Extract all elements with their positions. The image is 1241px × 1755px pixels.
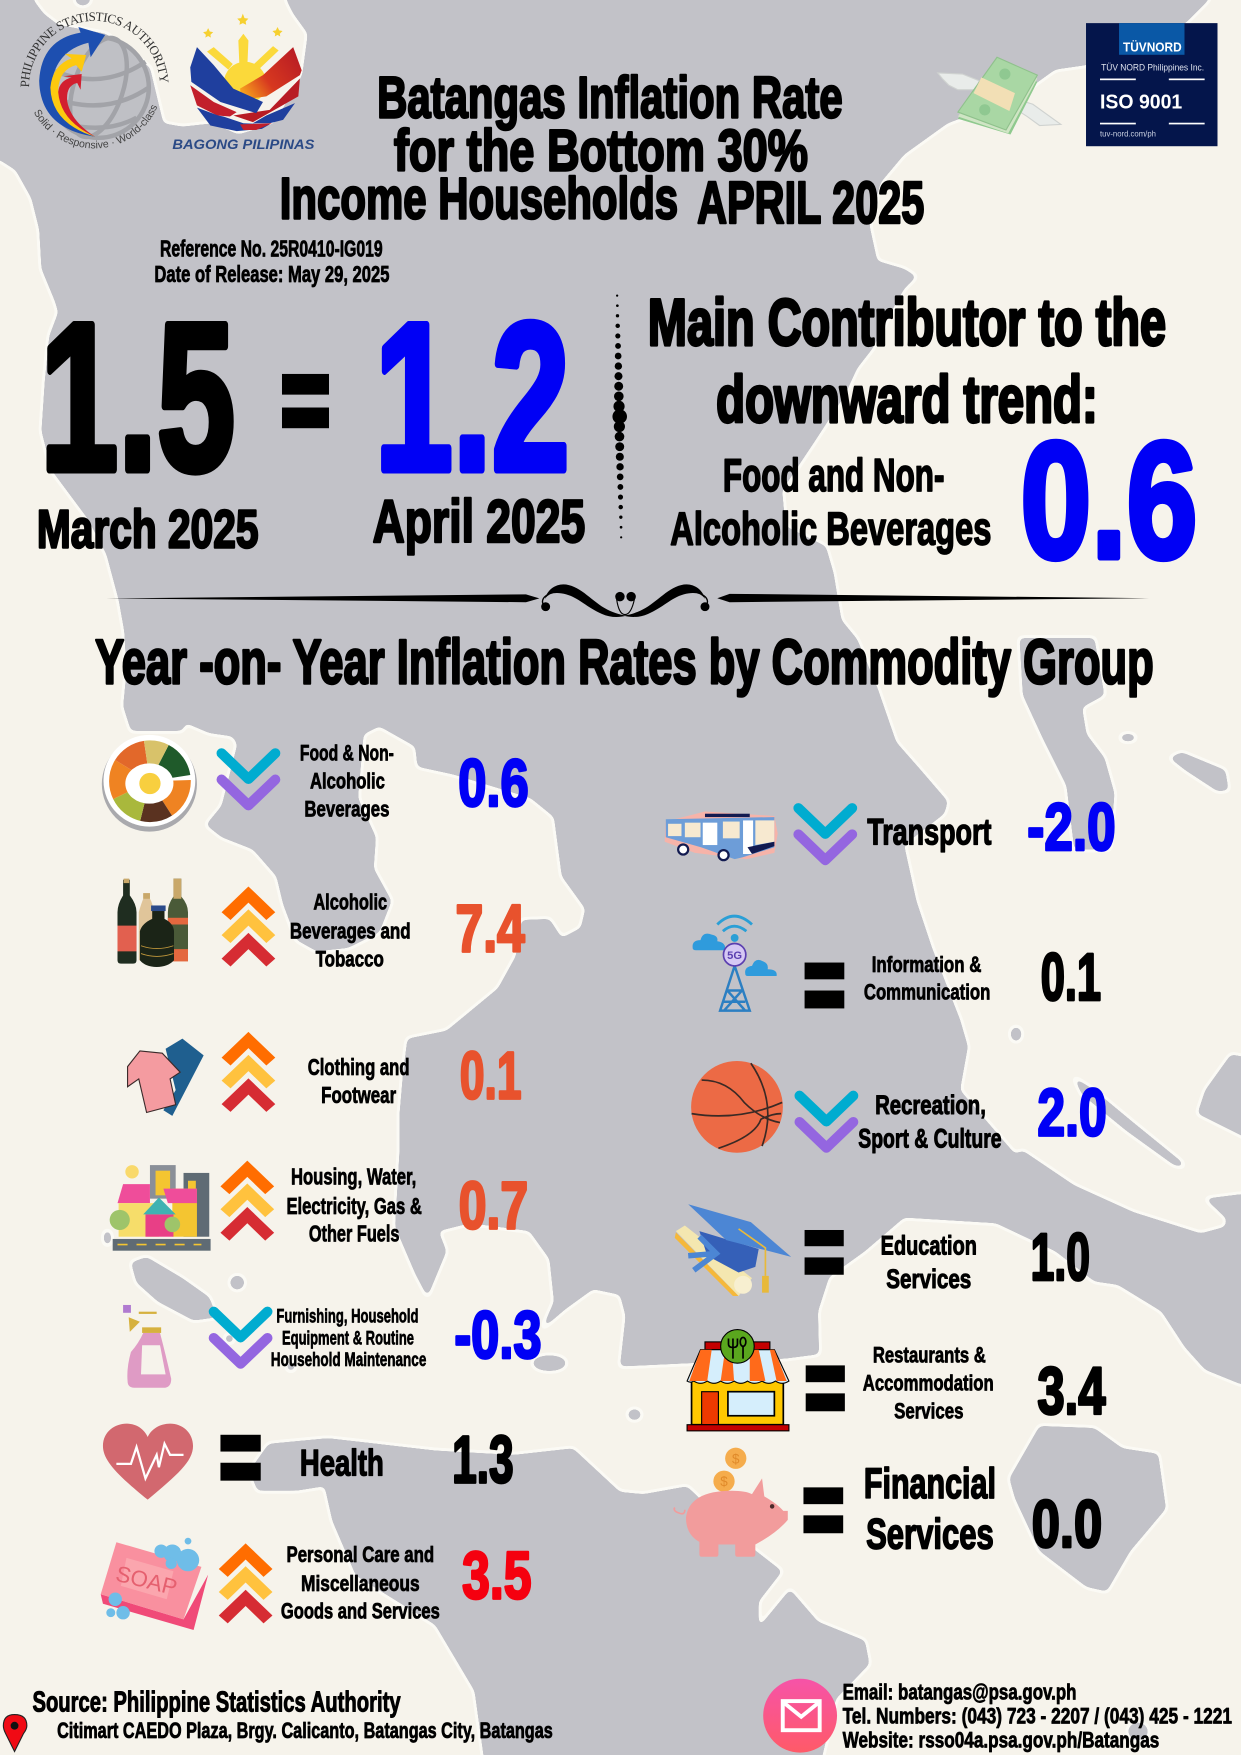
icon: bus	[665, 811, 778, 860]
label: Services	[866, 1511, 994, 1558]
label	[864, 1461, 996, 1558]
headline rate: April 2025: April 2025	[373, 487, 585, 555]
row: Recreation, Sport and Culture	[691, 1061, 1107, 1154]
label: Communication	[864, 979, 990, 1004]
icon: soap: SOAP	[113, 1561, 180, 1600]
icon: unchanged	[803, 1487, 843, 1533]
label: Miscellaneous	[301, 1571, 420, 1596]
logo: TUV NORD ISO 9001: TÜV NORD Philippines Inc.	[1101, 63, 1204, 73]
label: Financial	[864, 1461, 996, 1508]
label	[863, 1343, 994, 1424]
row: Health	[103, 1422, 514, 1500]
label	[290, 889, 411, 971]
label: Furnishing, Household	[276, 1305, 419, 1327]
icon: houses	[110, 1165, 211, 1251]
row: Information and Communication	[693, 916, 1101, 1015]
headline rate: March 2025	[37, 280, 258, 559]
main contributor panel: Food and Non-	[723, 449, 944, 501]
label: Accommodation	[863, 1371, 994, 1396]
dotted divider	[612, 294, 627, 538]
label: Electricity, Gas &	[286, 1193, 422, 1219]
value: 1.3	[452, 1422, 514, 1497]
label: Beverages	[304, 797, 389, 822]
label: Alcoholic	[313, 889, 387, 914]
label: Transport	[867, 811, 991, 852]
equal sign	[282, 374, 329, 428]
title: Income Households	[280, 166, 678, 231]
icon: trend up	[220, 1161, 274, 1241]
value: -2.0	[1027, 790, 1116, 865]
icon: piggy bank	[674, 1448, 788, 1557]
label	[864, 952, 990, 1004]
icon: location pin	[3, 1715, 27, 1751]
label	[281, 1542, 440, 1623]
label: Services	[894, 1399, 963, 1424]
icon: bottles	[117, 879, 188, 967]
logo: Bagong Pilipinas: BAGONG PILIPINAS	[172, 136, 315, 152]
main contributor panel: Alcoholic Beverages	[670, 503, 991, 555]
source and address: Source: Philippine Statistics Authority	[32, 1687, 401, 1719]
value: 0.6	[458, 746, 529, 821]
icon: trend up	[222, 886, 275, 966]
logo: Philippine Statistics Authority	[20, 12, 168, 148]
value: 0.1	[1041, 940, 1101, 1015]
label: Recreation,	[875, 1090, 986, 1120]
row: Financial Services	[674, 1448, 1102, 1562]
label: Footwear	[321, 1082, 396, 1108]
contact details	[843, 1679, 1232, 1753]
icon: heart with pulse	[103, 1424, 193, 1500]
label	[308, 1054, 410, 1108]
value: 0.1	[460, 1039, 521, 1114]
label: Health	[300, 1443, 384, 1484]
icon: 5G tower: 5G	[727, 950, 742, 962]
value: -0.3	[454, 1298, 542, 1373]
label: Other Fuels	[309, 1221, 399, 1247]
logo: TUV NORD ISO 9001: TÜVNORD	[1123, 40, 1182, 55]
row: Furnishing, Household Equipment and Routine Household Maintenance	[123, 1298, 542, 1388]
logo: Philippine Statistics Authority: Solid · Responsive · World-class	[34, 105, 157, 148]
label	[858, 1090, 1002, 1154]
row: Transport	[665, 790, 1116, 865]
row: Housing, Water, Electricity, Gas and Other Fuels	[110, 1161, 528, 1251]
icon: restaurant shop	[687, 1330, 789, 1431]
logo: TUV NORD ISO 9001	[1086, 23, 1218, 146]
icon: trend down	[222, 753, 275, 805]
icon: spray bottle	[123, 1305, 171, 1388]
ornamental divider	[106, 584, 1149, 617]
label	[881, 1231, 977, 1294]
headline rate: March 2025: March 2025	[37, 499, 258, 559]
icon: mail	[763, 1679, 837, 1753]
value: 2.0	[1037, 1075, 1107, 1150]
headline rate: April 2025: 1.2	[375, 280, 570, 515]
label: Personal Care and	[286, 1542, 434, 1567]
row: Personal Care and Miscellaneous Goods and Services	[101, 1538, 532, 1630]
icon: trend up	[219, 1543, 272, 1623]
label: Services	[886, 1264, 971, 1294]
value: 1.0	[1031, 1220, 1090, 1295]
icon: trend down	[798, 808, 852, 860]
contact details: Email: batangas@psa.gov.ph	[843, 1679, 1077, 1704]
logo: TUV NORD ISO 9001: ISO 9001	[1100, 92, 1182, 114]
icon: trend down	[214, 1312, 267, 1364]
source and address: Citimart CAEDO Plaza, Brgy. Calicanto, Batangas City, Batangas	[57, 1718, 553, 1743]
title	[280, 66, 924, 236]
icon: basketball	[691, 1061, 783, 1153]
icon: soap	[101, 1538, 208, 1630]
reference number and release date: Reference No. 25R0410-IG019	[160, 235, 383, 261]
value: 0.0	[1032, 1487, 1102, 1562]
icon: unchanged	[806, 1365, 845, 1411]
label	[271, 1305, 426, 1371]
icon: unchanged	[805, 1230, 844, 1275]
icon: trend down	[800, 1096, 853, 1148]
label: Information &	[872, 952, 981, 977]
row: Education Services	[675, 1204, 1090, 1296]
row: Food and Non-Alcoholic Beverages	[102, 735, 529, 832]
label: Restaurants &	[873, 1343, 986, 1368]
icon: graduation cap and diploma	[675, 1204, 791, 1296]
icon: flying money	[938, 57, 1061, 134]
value: 3.5	[462, 1539, 532, 1614]
icon: clothes	[128, 1039, 204, 1116]
reference number and release date: Date of Release: May 29, 2025	[154, 261, 390, 287]
icon: piggy bank: $	[732, 1451, 740, 1466]
label: Beverages and	[290, 918, 411, 943]
label: Equipment & Routine	[282, 1328, 414, 1350]
label: Clothing and	[308, 1054, 410, 1080]
headline rate: March 2025: 1.5	[40, 280, 235, 515]
label: Education	[881, 1231, 977, 1261]
row: Alcoholic Beverages and Tobacco	[117, 879, 525, 971]
logo: Philippine Statistics Authority: PHILIPPINE STATISTICS AUTHORITY	[20, 12, 168, 87]
value: 0.7	[459, 1168, 528, 1243]
row: Clothing and Footwear	[128, 1032, 521, 1116]
icon: piggy bank: $	[720, 1474, 728, 1489]
main contributor panel: downward trend:	[716, 362, 1098, 436]
label	[286, 1164, 422, 1247]
label: Sport & Culture	[858, 1124, 1002, 1154]
icon: food plate	[102, 735, 197, 832]
icon: trend up	[222, 1032, 275, 1112]
label: Alcoholic	[310, 769, 385, 794]
value: 3.4	[1037, 1354, 1106, 1429]
label: Housing, Water,	[291, 1164, 416, 1190]
source and address	[3, 1687, 553, 1751]
icon: unchanged	[805, 963, 844, 1008]
title: APRIL 2025	[697, 169, 924, 236]
label: Goods and Services	[281, 1598, 440, 1623]
icon: unchanged	[220, 1435, 261, 1481]
logo: Bagong Pilipinas	[172, 14, 315, 152]
label: Food & Non-	[300, 741, 394, 766]
main contributor panel	[648, 285, 1197, 593]
row: Restaurants and Accommodation Services	[687, 1330, 1106, 1431]
title: Batangas Inflation Rate	[377, 66, 843, 131]
logo: TUV NORD ISO 9001: tuv-nord.com/ph	[1100, 129, 1156, 139]
icon: 5G tower	[693, 916, 777, 1011]
value: 7.4	[455, 891, 525, 966]
reference number and release date	[154, 235, 390, 287]
title: for the Bottom 30%	[394, 118, 808, 183]
headline rate: April 2025	[373, 280, 585, 555]
label: Tobacco	[316, 946, 384, 971]
label: Household Maintenance	[271, 1349, 426, 1371]
label	[300, 741, 394, 822]
